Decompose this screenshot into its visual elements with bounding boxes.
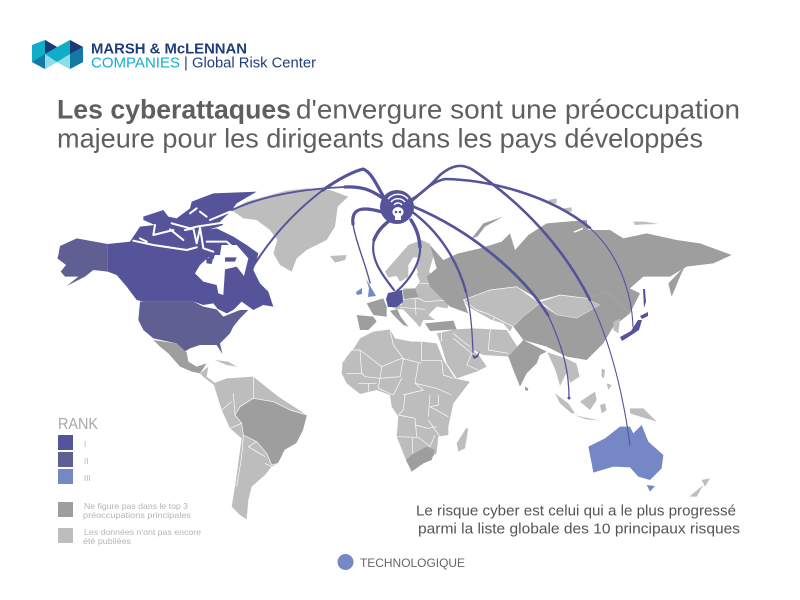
legend rank III: III — [84, 474, 91, 483]
leg to Singapore — [412, 206, 569, 397]
logo text — [91, 40, 316, 72]
South Africa — [406, 447, 435, 472]
title: Les cyberattaques — [57, 94, 291, 124]
Central America — [200, 367, 225, 390]
Japan — [620, 289, 648, 341]
Southeast Asia — [547, 352, 580, 387]
logo icon — [32, 40, 83, 69]
callout text: Le risque cyber est celui qui a le plus progressé — [416, 504, 736, 520]
callout text — [416, 504, 740, 538]
UK and Ireland — [356, 279, 376, 297]
map: Scandinavia — [385, 240, 433, 282]
world map — [57, 188, 732, 519]
map: ranked countries — [356, 279, 648, 400]
leg to northern Canada — [232, 187, 388, 210]
South America light — [213, 377, 307, 519]
Italy — [390, 309, 408, 327]
legend rank II — [58, 452, 88, 467]
legs to Germany — [373, 220, 420, 292]
Germany — [386, 290, 403, 307]
Korea — [613, 318, 620, 333]
Caspian Sea — [465, 307, 472, 327]
Kazakhstan — [463, 287, 540, 327]
legend title: RANK — [58, 416, 98, 433]
leg to eastern Canada — [247, 169, 386, 277]
USA — [138, 302, 248, 354]
Iran and Levant — [437, 328, 518, 357]
Russia — [427, 220, 732, 313]
Mongolia — [540, 295, 600, 318]
leg to the UK — [353, 209, 388, 283]
Poland — [402, 288, 418, 299]
logo text: | Global Risk Center — [184, 54, 316, 72]
title: majeure pour les dirigeants dans les pays développés — [57, 124, 703, 154]
map: Africa — [342, 329, 470, 472]
skull — [392, 207, 404, 220]
legend not in top 3: Ne figure pas dans le top 3 — [84, 501, 188, 511]
Africa borders — [343, 330, 453, 453]
spider legs connecting the cyber threat to countries — [232, 166, 633, 445]
China — [513, 292, 630, 360]
Arabia — [440, 338, 487, 378]
legend — [58, 416, 201, 546]
Central Asia — [462, 283, 520, 332]
Iceland — [330, 255, 347, 263]
Turkey — [425, 321, 457, 331]
leg to the UAE — [411, 211, 473, 352]
France — [367, 298, 387, 317]
legend not in top 3: préoccupations principales — [83, 510, 191, 520]
Central and Eastern Europe — [387, 270, 450, 327]
logo text: COMPANIES — [91, 54, 180, 72]
leg to Australia — [409, 166, 630, 445]
legend rank II: II — [84, 457, 88, 466]
legend rank III — [58, 469, 91, 484]
Spain — [357, 315, 377, 330]
map: Asia — [427, 198, 732, 391]
legend rank I: I — [84, 440, 86, 449]
New Zealand — [689, 485, 703, 497]
leg to Japan — [409, 179, 633, 327]
Greenland — [232, 188, 348, 272]
Alaska — [57, 238, 108, 286]
Great Lakes — [203, 303, 222, 317]
map: North America — [57, 188, 387, 390]
category tag: TECHNOLOGIQUE — [360, 556, 465, 570]
Singapore — [568, 396, 570, 400]
Hudson Bay — [195, 245, 248, 295]
wifi arcs — [388, 194, 408, 205]
title — [57, 94, 740, 154]
legend data not published: été publiées — [83, 536, 131, 546]
title: d'envergure sont une préoccupation — [296, 94, 740, 124]
Madagascar — [457, 428, 468, 452]
legend data not published — [58, 527, 201, 546]
India — [508, 340, 547, 387]
Canada — [108, 192, 273, 317]
map: South America — [213, 377, 307, 519]
UAE — [472, 351, 480, 359]
Australia — [588, 425, 663, 480]
icon: cyber skull with wifi — [380, 190, 414, 224]
legend not in top 3 — [58, 501, 191, 520]
Tasmania — [647, 485, 655, 492]
Arctic channels — [133, 208, 240, 253]
Brazil — [235, 398, 307, 465]
callout text: parmi la liste globale des 10 principaux risques — [418, 522, 740, 538]
map: Oceania — [555, 383, 710, 497]
Indonesia — [555, 383, 657, 422]
map: Europe and Middle East — [387, 270, 520, 378]
logo — [32, 40, 316, 72]
Mexico — [153, 340, 207, 373]
legend data not published: Les données n'ont pas encore — [84, 527, 201, 537]
legend rank I — [58, 435, 86, 450]
logo text: MARSH & McLENNAN — [91, 40, 247, 58]
